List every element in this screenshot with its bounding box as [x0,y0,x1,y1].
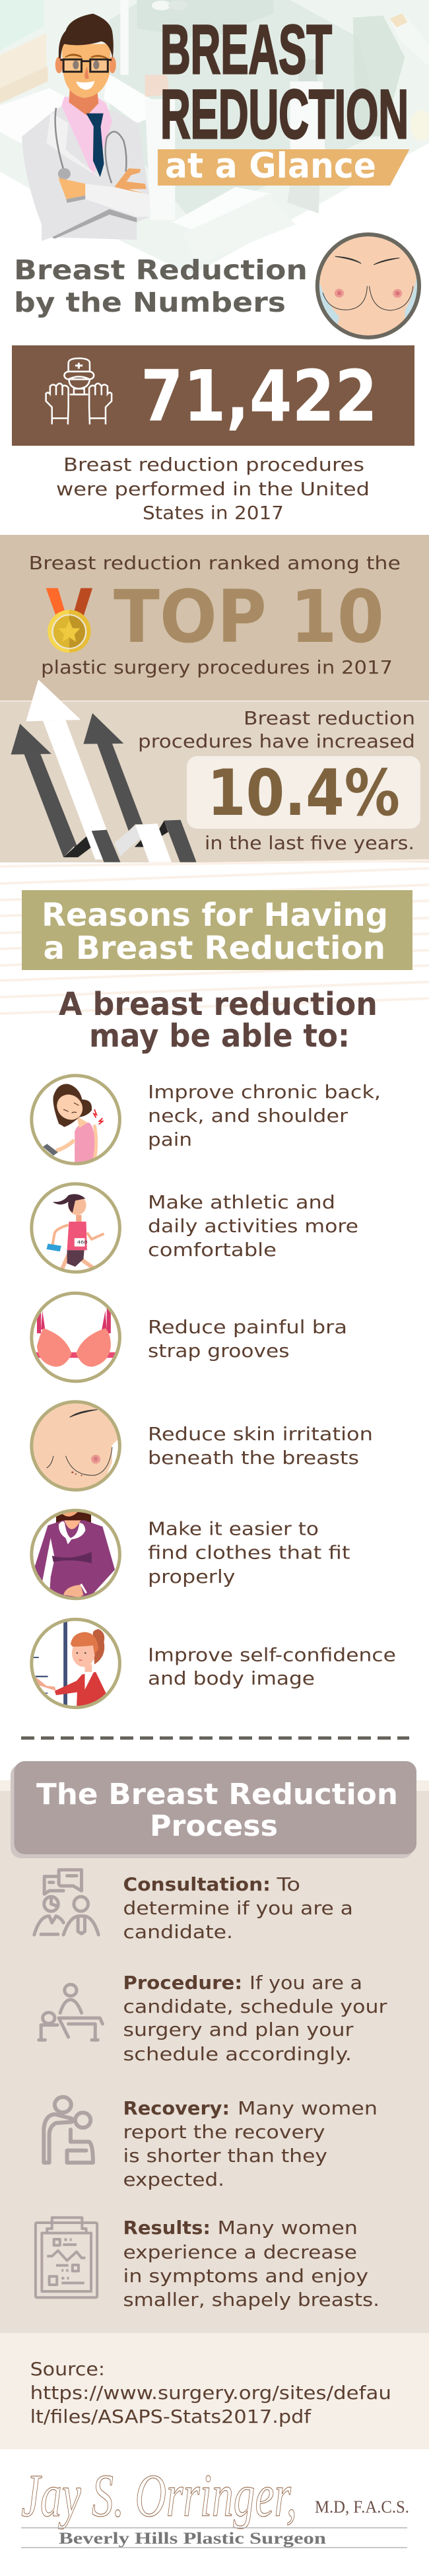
logo tagline: Beverly Hills Plastic Surgeon [59,2530,326,2548]
doctor cuff shadow [66,195,85,203]
reason text: Improve chronic back, [148,1082,381,1103]
reason 6: confidence: and body image [148,1668,315,1689]
text: increase: Breast reduction [244,708,415,729]
doctor coat [22,104,150,241]
heading: by the numbers: by the Numbers [14,287,286,318]
reason 1: pain relief: neck, and shoulder [148,1105,348,1127]
step text: Procedure: [123,1972,242,1994]
doctor face [61,44,111,98]
reason 2: activities: daily activities more [148,1216,358,1237]
doctor hair [59,14,114,58]
stat caption: were performed in the United [56,479,370,500]
title banner: at a Glance [165,146,376,186]
doctor tie [86,114,104,177]
stat caption [56,454,370,524]
section header: process [11,1761,416,1858]
top 10 label: TOP 10 [114,574,384,659]
icon: bra [36,1308,116,1367]
step 4: results: smaller, shapely breasts. [123,2289,380,2311]
section header: reasons [22,890,412,970]
icon: recovery [44,2097,93,2163]
section header: reasons: Reasons for Having [42,897,388,934]
panel: source [0,2333,429,2449]
doctor lapel [46,112,101,178]
logo: Jay S. Orringer [21,2462,409,2548]
panel: growth [0,701,429,862]
stethoscope chest piece [58,168,71,180]
stat number: 71,422 [141,356,378,438]
doctor shirt [61,97,112,176]
panel: growth: procedures have increased [138,731,415,752]
stat box [187,756,420,829]
step 2: procedure [39,1972,387,2065]
step 2: procedure: If you are a [249,1972,362,1994]
reason 4: skin irritation: beneath the breasts [148,1447,359,1469]
icon: medal [46,588,92,652]
icon: breasts in oval [315,234,424,343]
reason text: Improve self-confidence [148,1644,396,1665]
step 2: procedure: surgery and plan your [123,2019,354,2040]
heading: by the numbers: Breast Reduction [14,254,308,286]
icon ring [32,1076,119,1164]
background stripes [0,860,429,1014]
doctor fingers [114,168,147,193]
section header: process: Process [150,1809,278,1843]
logo credentials: M.D, F.A.C.S. [315,2497,409,2517]
reason 3: bra straps [32,1293,347,1381]
doctor lower coat fold [52,209,137,239]
icon ring [32,1293,119,1381]
step text: Consultation: [123,1874,271,1895]
icon: consultation [34,1870,98,1935]
stat caption: States in 2017 [143,503,284,524]
panel: source: Source: [30,2359,105,2380]
panel: source: https://www.surgery.org/sites/defau [30,2383,391,2404]
icon ring [32,1619,119,1708]
subheading: may be able to: [89,1018,350,1055]
section header: process: The Breast Reduction [36,1778,398,1811]
step text: Results: [123,2217,211,2239]
illustration: smiling doctor [22,14,150,241]
reason text: Reduce skin irritation [148,1424,373,1445]
doctor hand [58,178,85,199]
reason 3: bra straps: strap grooves [148,1340,289,1362]
icon: results clipboard [36,2217,97,2297]
panel: top 10: Breast reduction ranked among the [29,553,401,574]
icon: skin irritation [32,1401,120,1490]
panel: top 10 [0,535,429,701]
step 2: procedure: candidate, schedule your [123,1996,387,2017]
doctor stethoscope [55,108,126,183]
step 1: consultation: candidate. [123,1922,233,1943]
step 1: consultation: To [276,1874,300,1895]
icon: woman running [46,1194,104,1270]
icon: woman with neck pain [43,1084,102,1162]
doctor ears [55,57,63,73]
stat panel: 71,422 [12,345,414,446]
reason 6: confidence [32,1619,396,1708]
step 3: recovery: expected. [123,2169,224,2190]
panel: growth: in the last five years. [205,833,414,854]
doctor neck [69,88,98,116]
step 4: results: in symptoms and enjoy [123,2266,368,2287]
doctor nose [84,66,89,79]
stat percentage: 10.4% [207,756,400,830]
icon ring [32,1510,119,1599]
doctor eyes [73,61,79,69]
reason text: Make it easier to [148,1519,319,1540]
icon: woman in purple top [34,1510,115,1599]
panel: top 10: plastic surgery procedures in 2017 [41,657,393,678]
icon: procedure [39,1984,102,2040]
reason 4: skin irritation [32,1401,373,1490]
reason 2: activities: comfortable [148,1239,277,1261]
title [160,11,409,153]
step 3: recovery: Many women [238,2098,378,2119]
heading: by the numbers [14,254,308,318]
icon: surgeon with gloves [46,359,112,425]
step 1: consultation: determine if you are a [123,1898,353,1919]
icon: woman running: 460 [77,1239,88,1245]
reason text: Reduce painful bra [148,1317,347,1338]
doctor glasses [60,59,112,72]
reason 1: pain relief: pain [148,1129,192,1150]
step 4: results: experience a decrease [123,2242,357,2263]
doctor sleeve [85,184,150,217]
reason 5: clothes: properly [148,1566,235,1587]
reason 2: activities [32,1184,358,1272]
icon ring [32,1184,119,1272]
step 3: recovery [44,2097,378,2190]
section header: reasons: a Breast Reduction [44,930,385,967]
stat caption: Breast reduction procedures [63,454,364,475]
step 1: consultation [34,1870,353,1943]
reason 5: clothes: find clothes that fit [148,1543,350,1564]
icon: rising arrows [11,679,197,862]
hero background: isometric operating room [0,0,429,275]
step 3: recovery: report the recovery [123,2122,325,2143]
icon ring [32,1402,119,1490]
reason 5: clothes [32,1510,350,1599]
step 4: results: Many women [218,2217,358,2239]
reason 1: pain relief [32,1076,381,1164]
logo signature: Jay S. Orringer, [21,2462,297,2529]
panel: source: lt/files/ASAPS-Stats2017.pdf [30,2406,312,2427]
icon: woman at measuring wall [33,1620,107,1708]
doctor smile [76,81,94,90]
subheading: A breast reduction [59,986,378,1023]
doctor eyebrows [65,53,107,59]
step 3: recovery: is shorter than they [123,2145,327,2167]
subheading [59,986,378,1055]
step text: Recovery: [123,2098,230,2119]
reason text: Make athletic and [148,1192,335,1213]
step 4: results [36,2217,380,2311]
step 2: procedure: schedule accordingly. [123,2044,352,2065]
panel: process background [0,1780,429,2333]
